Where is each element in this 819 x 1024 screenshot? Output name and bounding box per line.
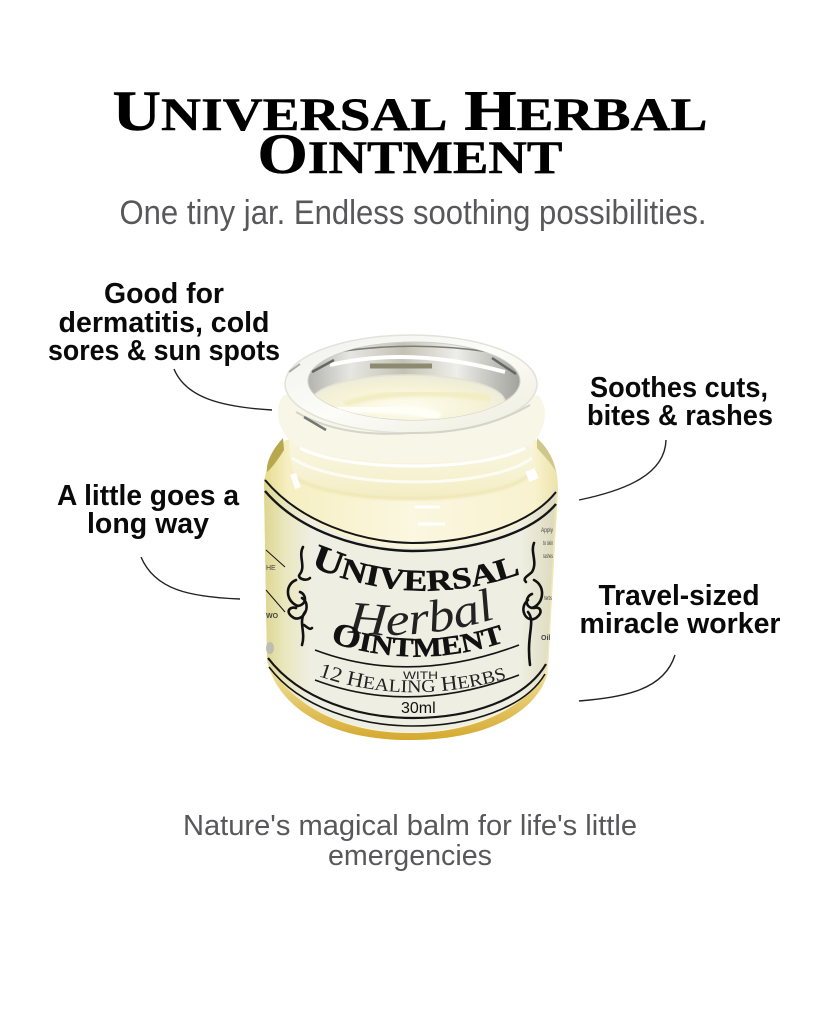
callout: cuts: bites & rashes: [587, 400, 773, 432]
callout: travel: Travel-sized: [598, 580, 760, 612]
rim reflections: [296, 405, 530, 434]
jar opening: [308, 342, 520, 420]
label small side text: WO: [266, 613, 279, 620]
label text: Herbal: Herbal: [347, 588, 493, 636]
footer text: Nature's magical balm for life's little: [183, 810, 637, 842]
footer text: emergencies: [328, 840, 492, 872]
amber base: [268, 664, 548, 740]
callout: dermatitis: dermatitis, cold: [58, 307, 270, 339]
label border lines: [265, 480, 556, 726]
callout: dermatitis: sores & sun spots: [48, 335, 280, 367]
highlights: [415, 507, 445, 524]
label: [264, 478, 556, 732]
shoulder shadow: [267, 438, 284, 472]
label small side text: [266, 528, 553, 642]
jar: [264, 334, 558, 740]
glass reflections: [330, 357, 505, 372]
label small side text: to skin: [543, 541, 553, 547]
label small side text: rashes: [543, 554, 553, 560]
rim: [285, 335, 537, 433]
callout: a little: [57, 480, 240, 599]
callout: dermatitis: [48, 278, 280, 410]
label small side text: Apply: [541, 528, 553, 534]
label text: 30ml: 30ml: [401, 700, 436, 717]
footer text: [183, 810, 637, 872]
label small side text: HE: [266, 565, 276, 572]
jar body: [264, 440, 558, 740]
ornament: left scroll: [288, 547, 312, 645]
label text: 12 Healing Herbs: 12 HEALING HERBS: [320, 664, 505, 692]
callout: dermatitis: Good for: [104, 278, 224, 310]
label small side text: Oil: [541, 635, 550, 642]
callout: travel: [579, 580, 780, 701]
callout: cuts: [579, 372, 773, 500]
subtitle: One tiny jar. Endless soothing possibilities.: [120, 194, 706, 232]
title: OINTMENT: [258, 123, 562, 186]
label text: Ointment: OINTMENT: [334, 624, 502, 658]
label text: with: WITH: [403, 670, 438, 682]
label small side text: herbs: [544, 596, 552, 602]
callout: cuts: Soothes cuts,: [590, 372, 768, 404]
callout: a little: A little goes a: [57, 480, 240, 512]
callout: travel: miracle worker: [580, 608, 780, 640]
title: [112, 80, 708, 186]
inner neck: [289, 430, 534, 499]
ointment surface: [314, 374, 506, 420]
label text: Universal: UNIVERSAL: [316, 544, 519, 592]
callout: a little: long way: [87, 508, 209, 540]
seal: [266, 642, 274, 654]
ornament: right scroll: [523, 543, 542, 665]
title: UNIVERSAL HERBAL: [112, 80, 708, 143]
neck band: [278, 395, 545, 463]
